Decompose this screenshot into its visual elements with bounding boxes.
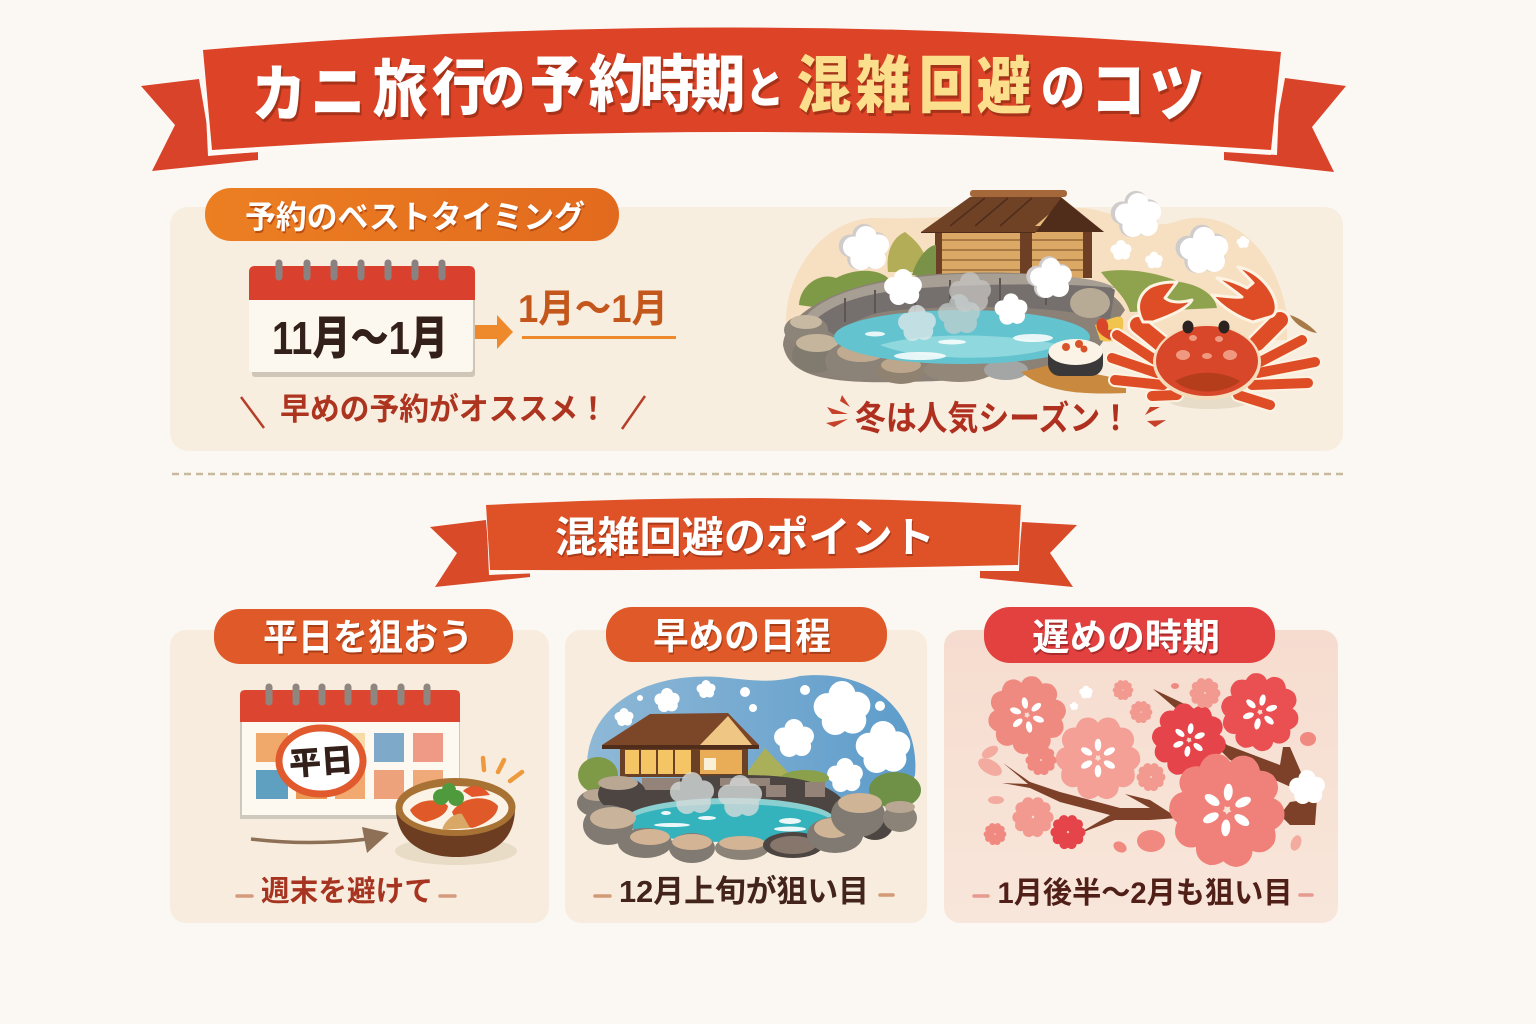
title text: 時 <box>640 51 694 120</box>
ribbon fold outline <box>203 27 1281 156</box>
water <box>834 310 1090 364</box>
title text: 回 <box>919 52 973 121</box>
weekday badge <box>279 728 363 794</box>
sushi platter <box>1021 317 1126 394</box>
icon: calendar 11月〜1月: 11月～1月 <box>272 312 448 364</box>
title text: 混 <box>797 52 851 121</box>
winter season caption: 冬は人気シーズン！ <box>855 399 1131 438</box>
sky <box>587 675 915 800</box>
heading pill: 予約のベストタイミング <box>245 199 585 235</box>
title ribbon <box>141 27 1346 172</box>
arrow <box>251 827 389 853</box>
lodge <box>602 713 759 777</box>
heading pill: 早めの日程 <box>653 616 831 657</box>
illustration: cherry blossoms <box>975 666 1325 877</box>
title text: 期 <box>691 51 745 120</box>
illustration: snowy onsen <box>577 675 921 863</box>
heading pill <box>984 607 1275 663</box>
snow clouds <box>615 680 910 792</box>
caption: 週末を避けて <box>261 875 433 908</box>
title text: 行 <box>432 54 486 123</box>
panel background <box>565 630 927 923</box>
title text: ツ <box>1150 61 1204 130</box>
ribbon main band <box>203 27 1281 150</box>
icon: crab bowl <box>395 758 522 865</box>
rim stones <box>784 274 1115 384</box>
stones <box>577 776 917 863</box>
title text: と <box>745 63 784 113</box>
water <box>625 798 835 842</box>
branches <box>1002 689 1317 834</box>
section heading text: 混雑回避のポイント <box>555 514 935 561</box>
late date label: 1月～1月 <box>518 288 668 331</box>
steam <box>670 772 762 817</box>
panel background <box>170 630 549 923</box>
title text: 避 <box>977 53 1031 122</box>
title text: 雑 <box>856 52 910 121</box>
heading pill <box>205 188 619 241</box>
blossoms <box>975 666 1316 877</box>
crab <box>1112 267 1317 409</box>
title text: 予 <box>530 51 584 120</box>
steam clouds <box>839 191 1249 341</box>
trees <box>799 232 1217 312</box>
caption: 12月上旬が狙い目 <box>619 874 869 909</box>
panel: late season <box>944 607 1338 923</box>
heading pill <box>606 607 887 662</box>
hills and foliage <box>578 748 921 808</box>
panel: weekdays <box>170 609 549 923</box>
title text: カ <box>252 61 306 130</box>
title text: 旅 <box>373 56 427 125</box>
title text: コ <box>1091 57 1145 126</box>
peach backdrop <box>786 208 1287 345</box>
title text: の <box>1041 59 1085 116</box>
ribbon right tail <box>1224 78 1346 172</box>
ribbon left tail <box>141 79 258 171</box>
weekday badge: 平日 <box>288 742 354 782</box>
title text: の <box>481 59 525 116</box>
panel: booking best timing <box>170 188 1343 451</box>
bathhouse <box>921 190 1104 278</box>
illustration: onsen and crab <box>783 190 1317 409</box>
icon: calendar <box>240 687 460 819</box>
early booking note: 早めの予約がオススメ！ <box>280 392 608 427</box>
panel background <box>170 207 1343 451</box>
panel background <box>944 630 1338 923</box>
caption: 1月後半～2月も狙い目 <box>998 877 1292 910</box>
heading pill: 平日を狙おう <box>263 617 473 658</box>
section ribbon <box>430 498 1077 587</box>
title text: ニ <box>311 59 365 128</box>
heading pill <box>214 609 513 664</box>
heading pill: 遅めの時期 <box>1032 617 1220 658</box>
back stone band <box>625 775 850 830</box>
icon: calendar 11月〜1月 <box>249 263 475 377</box>
title text: 約 <box>589 51 643 120</box>
panel: early schedule <box>565 607 927 923</box>
stone rim <box>783 272 1125 382</box>
arrow to date <box>475 315 513 349</box>
